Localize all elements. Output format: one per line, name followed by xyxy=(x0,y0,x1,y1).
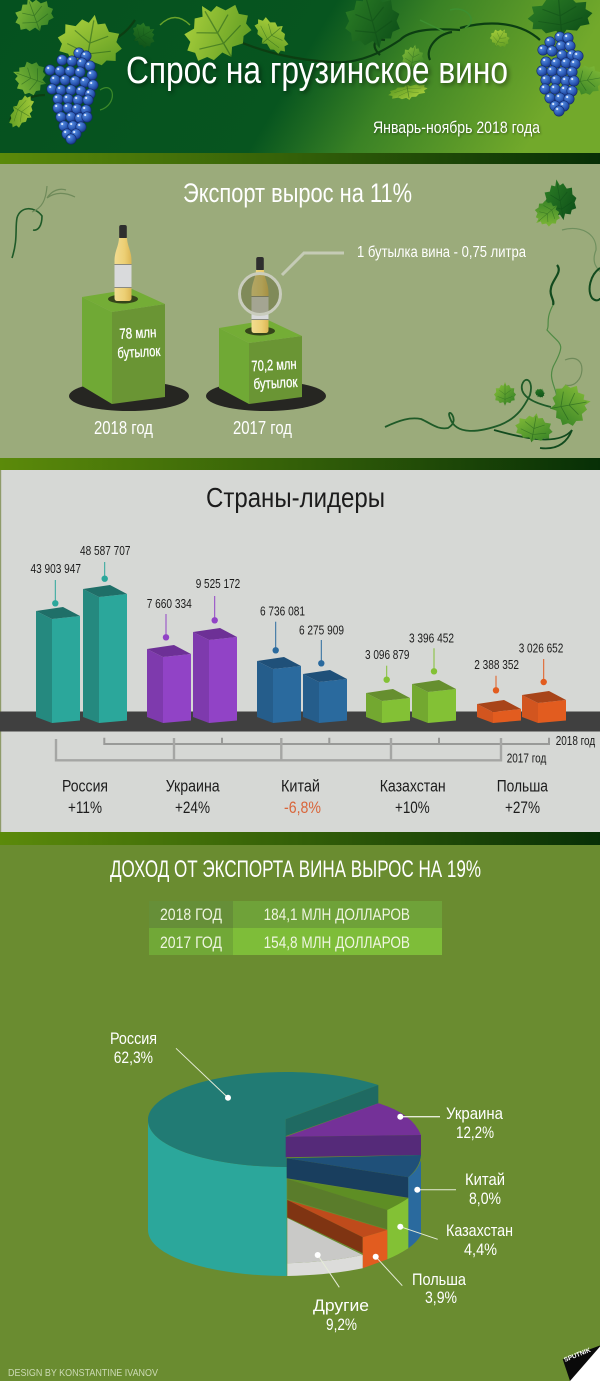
pie labels: 62,3% xyxy=(114,1048,153,1067)
vine: top left tendril xyxy=(12,186,75,258)
bars: China xyxy=(257,657,347,723)
value labels: 7 660 334 xyxy=(147,597,192,611)
callout text: 1 бутылка вина - 0,75 литра xyxy=(357,244,526,261)
revenue table: 184,1 МЛН ДОЛЛАРОВ xyxy=(264,906,410,924)
vine: right side xyxy=(385,229,600,448)
subtitle: Январь-ноябрь 2018 года xyxy=(373,119,541,137)
value 2017 xyxy=(251,356,298,393)
logo: Sputnik xyxy=(563,1346,600,1381)
icon: grape cluster right xyxy=(537,32,583,116)
pie labels: Украина xyxy=(446,1104,503,1123)
value labels xyxy=(30,544,563,672)
pie labels: 9,2% xyxy=(326,1315,357,1334)
country names and change: +27% xyxy=(505,798,540,817)
credit: DESIGN BY KONSTANTINE IVANOV xyxy=(8,1367,158,1379)
value 2018 xyxy=(116,324,161,362)
value markers xyxy=(52,562,547,694)
pie labels xyxy=(110,1029,513,1334)
country names and change: +10% xyxy=(395,798,430,817)
value labels: 6 275 909 xyxy=(299,624,344,638)
pie labels: Другие xyxy=(313,1296,369,1315)
vines in header xyxy=(10,9,540,120)
icon: magnifier xyxy=(240,274,280,314)
label 2017: 2017 год xyxy=(233,418,292,438)
country names and change: -6,8% xyxy=(284,798,321,817)
country names and change: Россия xyxy=(62,776,108,796)
slice: Kazakhstan xyxy=(287,1179,408,1259)
country names and change: Украина xyxy=(166,776,220,796)
panel: leading countries xyxy=(0,470,600,832)
slice: Russia xyxy=(148,1072,378,1276)
country names and change: Казахстан xyxy=(380,776,446,796)
value labels: 43 903 947 xyxy=(30,562,81,576)
revenue table: 2018 ГОД xyxy=(160,906,222,924)
slice: other xyxy=(287,1218,363,1276)
value labels: 3 396 452 xyxy=(409,632,454,646)
heading: Экспорт вырос на 11% xyxy=(183,178,412,208)
pie labels: Казахстан xyxy=(446,1221,513,1240)
divider band xyxy=(0,458,600,470)
pie labels: 8,0% xyxy=(469,1189,501,1208)
value labels: 3 026 652 xyxy=(519,642,563,656)
slice: Poland xyxy=(287,1200,387,1268)
bars: Poland xyxy=(477,691,566,723)
revenue table: 154,8 МЛН ДОЛЛАРОВ xyxy=(264,934,410,952)
country names and change: +24% xyxy=(175,798,210,817)
title: Спрос на грузинское вино xyxy=(126,50,508,92)
icon: grape cluster left xyxy=(45,48,98,144)
pie labels: 3,9% xyxy=(425,1288,457,1307)
pie labels: 4,4% xyxy=(464,1240,497,1259)
country names and change: Китай xyxy=(281,776,320,796)
value labels: 3 096 879 xyxy=(365,648,410,662)
pie labels: 12,2% xyxy=(456,1123,494,1142)
callout line xyxy=(282,253,344,275)
leaf: top right xyxy=(528,176,580,233)
ground strip xyxy=(0,712,600,732)
country names and change: Польша xyxy=(497,776,548,796)
pie leader lines xyxy=(176,1048,456,1287)
revenue table xyxy=(149,901,442,955)
value labels: 9 525 172 xyxy=(196,577,240,591)
label 2018: 2018 год xyxy=(94,418,153,438)
pedestal 2017 with bottle xyxy=(206,257,326,411)
country names and change xyxy=(62,776,548,817)
panel: bottle export xyxy=(0,164,600,458)
panel: revenue xyxy=(0,845,600,1381)
value labels: 6 736 081 xyxy=(260,604,305,618)
divider band xyxy=(0,832,600,845)
slice: Ukraine xyxy=(286,1103,421,1157)
country names and change: +11% xyxy=(68,798,102,817)
heading: Страны-лидеры xyxy=(206,482,385,513)
panel: header xyxy=(0,0,600,153)
pie labels: Китай xyxy=(465,1170,505,1189)
bracket: 2017 xyxy=(56,738,501,760)
logo: Sputnik: SPUTNIK xyxy=(563,1347,592,1364)
bracket: 2018 xyxy=(104,738,549,744)
leaves: bottom right xyxy=(494,381,594,445)
value 2017: бутылок xyxy=(253,374,298,393)
value labels: 2 388 352 xyxy=(474,658,519,672)
pedestal 2018 with bottle xyxy=(69,225,189,411)
value 2017: 70,2 млн xyxy=(251,356,297,375)
divider band xyxy=(0,153,600,164)
bars: Russia xyxy=(36,585,127,723)
revenue table: 2017 ГОД xyxy=(160,934,222,952)
value 2018: бутылок xyxy=(117,343,161,362)
pie labels: Польша xyxy=(412,1270,466,1289)
pie labels: Россия xyxy=(110,1029,157,1048)
pie chart xyxy=(148,1072,421,1276)
value labels: 48 587 707 xyxy=(80,544,131,558)
bars: Ukraine xyxy=(147,628,237,723)
slice: China xyxy=(287,1155,421,1248)
leaves in header xyxy=(4,0,600,133)
bracket label 2017: 2017 год xyxy=(507,752,547,766)
bars: Kazakhstan xyxy=(366,680,456,723)
value 2018: 78 млн xyxy=(119,324,157,343)
